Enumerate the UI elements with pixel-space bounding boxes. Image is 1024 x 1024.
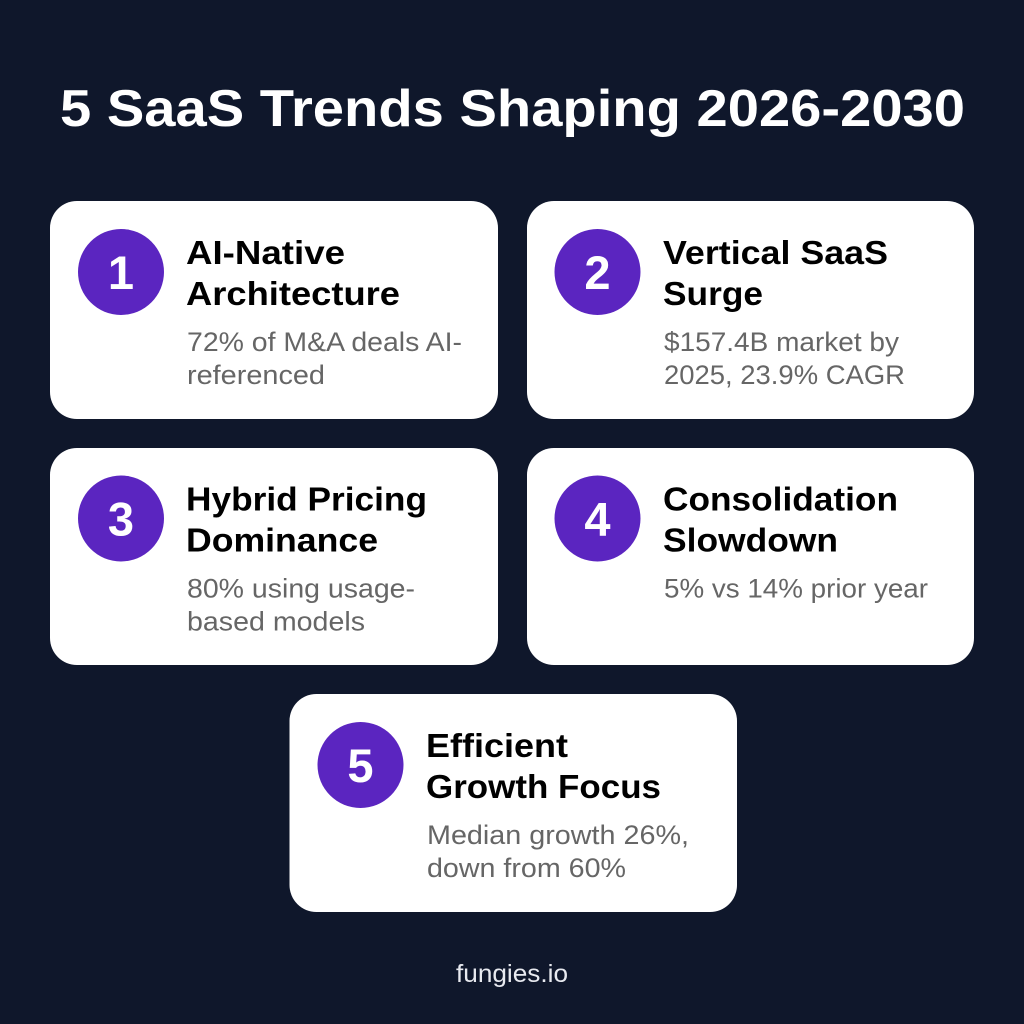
heading: trend 4 bbox=[663, 480, 898, 558]
panel: trend 5 Efficient Growth Focus bbox=[290, 694, 737, 912]
icon: number 2: 2 bbox=[584, 246, 611, 299]
text: trend 1 stat: 72% of M&A deals AI- bbox=[187, 327, 462, 357]
title: 5 SaaS Trends Shaping 2026-2030 bbox=[60, 80, 965, 138]
footer: brand: fungies.io bbox=[456, 960, 568, 988]
icon: number 4 bbox=[554, 476, 640, 562]
text: trend 5 stat: Median growth 26%, bbox=[427, 820, 689, 850]
text: trend 3 stat: 80% using usage- bbox=[187, 574, 415, 604]
panel: trend 1 AI-Native Architecture bbox=[50, 201, 498, 419]
text: trend 1 stat: referenced bbox=[187, 360, 325, 390]
icon: number 5: 5 bbox=[347, 739, 374, 792]
heading: trend 3: Dominance bbox=[186, 522, 378, 558]
icon: number 3: 3 bbox=[108, 492, 134, 546]
icon: number 5 bbox=[318, 722, 404, 808]
text: trend 5 stat: down from 60% bbox=[427, 853, 626, 883]
heading: trend 5 bbox=[426, 727, 661, 805]
icon: number 1 bbox=[78, 229, 164, 315]
heading: trend 1 bbox=[186, 234, 400, 312]
heading: trend 5: Growth Focus bbox=[426, 768, 661, 805]
heading: trend 1: AI-Native bbox=[186, 234, 345, 271]
text: trend 3 stat: based models bbox=[187, 606, 365, 636]
panel: trend 4 Consolidation Slowdown bbox=[527, 448, 974, 665]
heading: trend 2: Vertical SaaS bbox=[663, 234, 888, 271]
heading: trend 3 bbox=[186, 480, 427, 558]
icon: number 3 bbox=[78, 476, 164, 562]
heading: trend 3: Hybrid Pricing bbox=[186, 480, 427, 518]
text: trend 2 stat bbox=[664, 327, 905, 390]
text: trend 1 stat bbox=[187, 327, 462, 390]
icon: number 2 bbox=[554, 229, 640, 315]
text: trend 4 stat: 5% vs 14% prior year bbox=[664, 574, 928, 604]
text: trend 3 stat bbox=[187, 574, 415, 636]
icon: number 4: 4 bbox=[584, 492, 611, 546]
heading: trend 2 bbox=[663, 234, 888, 312]
panel: trend 2 Vertical SaaS Surge bbox=[527, 201, 974, 419]
text: trend 2 stat: 2025, 23.9% CAGR bbox=[664, 360, 905, 390]
heading: trend 1: Architecture bbox=[186, 275, 400, 312]
icon: number 1: 1 bbox=[108, 246, 134, 299]
heading: trend 5: Efficient bbox=[426, 727, 568, 764]
heading: trend 4: Slowdown bbox=[663, 522, 838, 558]
panel: trend 3 Hybrid Pricing Dominance bbox=[50, 448, 498, 665]
heading: trend 4: Consolidation bbox=[663, 480, 898, 518]
text: trend 5 stat bbox=[427, 820, 689, 883]
text: trend 2 stat: $157.4B market by bbox=[664, 327, 900, 357]
heading: trend 2: Surge bbox=[663, 275, 763, 312]
